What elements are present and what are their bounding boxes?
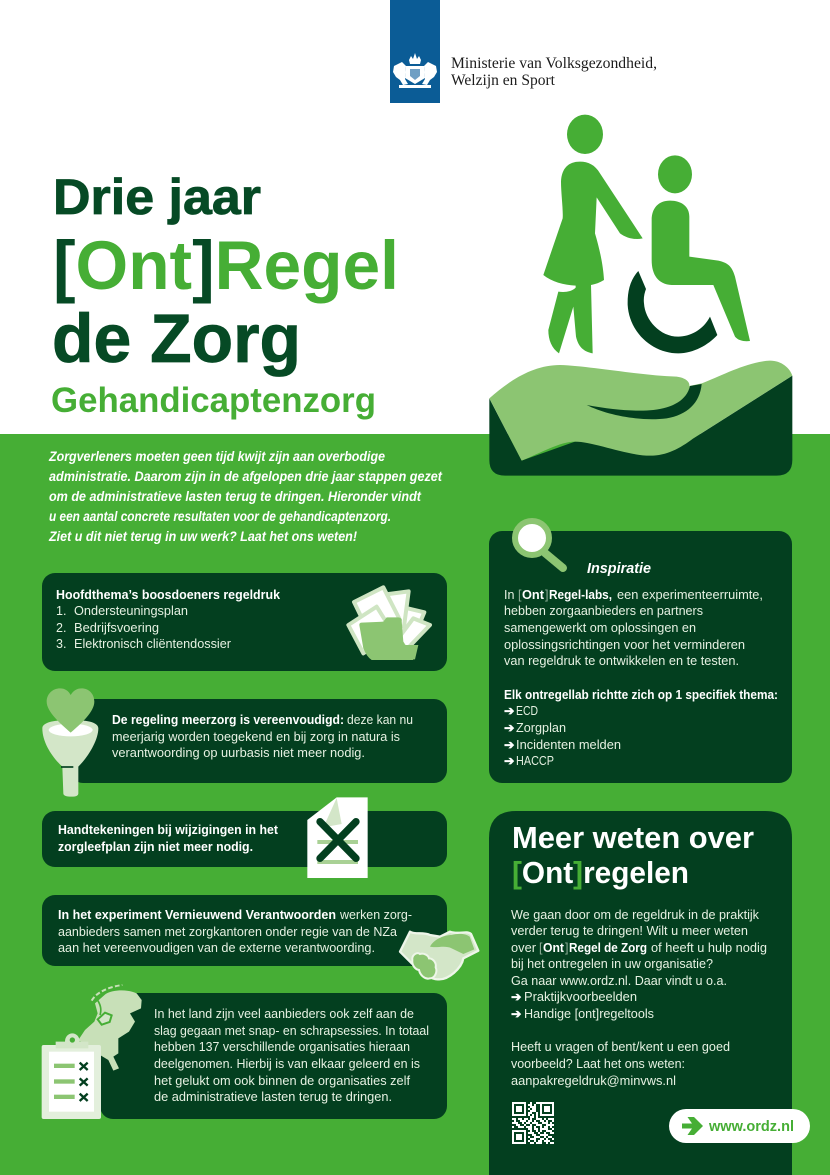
panel: inspiratie: ➔	[504, 738, 515, 752]
panel: hoofdthema's: Ondersteuningsplan	[74, 604, 188, 618]
panel: inspiratie: een experimenteerruimte,	[617, 588, 763, 602]
panel: inspiratie: Elk ontregellab richtte zich op 1 specifiek thema:	[504, 688, 778, 702]
panel: meer weten: [Ont]regelen	[512, 855, 689, 890]
panel: hoofdthema's: 1.	[56, 604, 66, 618]
icon: clipboard checklist	[42, 1033, 101, 1119]
panel: inspiratie: Incidenten melden	[516, 738, 621, 752]
icon: heart in funnel	[42, 688, 98, 797]
button: www.ordz.nl	[669, 1109, 810, 1143]
panel: regeling meerzorg: verantwoording op uurbasis niet meer nodig.	[112, 746, 365, 760]
panel: snap- en schrapsessies: het gelukt om ook binnen de organisaties zelf	[154, 1074, 411, 1088]
panel: inspiratie	[489, 521, 792, 783]
panel: hoofdthema's: Bedrijfsvoering	[74, 621, 159, 635]
panel: meer weten: over	[511, 941, 536, 955]
panel: meer weten: ➔	[511, 1007, 522, 1021]
panel: vernieuwend verantwoorden: In het experiment Vernieuwend Verantwoorden	[58, 908, 336, 922]
icon: handshake	[400, 932, 478, 979]
panel: meer weten: Heeft u vragen of bent/kent u een goed	[511, 1040, 730, 1054]
panel: inspiratie: ➔	[504, 721, 515, 735]
panel: inspiratie: Regel-labs,	[549, 588, 612, 602]
panel: vernieuwend verantwoorden: werken zorg-	[339, 908, 412, 922]
panel: inspiratie: [	[518, 588, 522, 602]
intro text	[48, 449, 442, 544]
title: [Ont]Regel	[53, 227, 399, 304]
panel: meer weten: ➔	[511, 990, 522, 1004]
panel: regeling meerzorg: De regeling meerzorg is vereenvoudigd:	[112, 713, 344, 727]
panel: handtekeningen: zorgleefplan zijn niet meer nodig.	[58, 840, 253, 854]
panel: inspiratie: ECD	[516, 704, 538, 718]
panel: hoofdthema's: Hoofdthema’s boosdoeners regeldruk	[56, 588, 280, 602]
panel: snap- en schrapsessies: slag gegaan met snap- en schrapsessies. In totaal	[154, 1024, 429, 1038]
QR code	[512, 1102, 554, 1144]
ministry name: Welzijn en Sport	[451, 72, 556, 89]
ministry name	[451, 55, 657, 89]
panel: hoofdthema's: Elektronisch cliëntendossier	[74, 637, 231, 651]
ministry name: Ministerie van Volksgezondheid,	[451, 55, 657, 72]
panel: inspiratie: oplossingsrichtingen voor het verminderen	[504, 638, 745, 652]
panel: inspiratie: hebben zorgaanbieders en partners	[504, 604, 703, 618]
panel: meer weten: of heeft u hulp nodig	[651, 941, 767, 955]
icon: arrow	[682, 1117, 703, 1135]
panel: inspiratie: ➔	[504, 754, 515, 768]
panel: snap- en schrapsessies: de administratieve lasten terug te dringen.	[154, 1090, 392, 1104]
panel: meer weten: bij het ontregelen in uw organisatie?	[511, 957, 713, 971]
panel: hoofdthema's	[42, 573, 447, 671]
panel: meer weten: We gaan door om de regeldruk in de praktijk	[511, 908, 760, 922]
panel: inspiratie: HACCP	[516, 754, 554, 768]
panel: inspiratie: Ont	[522, 588, 545, 602]
panel: meer weten: Handige [ont]regeltools	[524, 1007, 654, 1021]
panel: inspiratie: samengewerkt om oplossingen en	[504, 621, 696, 635]
panel: meer weten: verder terug te dringen! Wilt u meer weten	[511, 924, 748, 938]
panel: meer weten: Ont	[543, 941, 565, 955]
logo: Rijksoverheid	[390, 0, 440, 103]
panel: inspiratie: van regeldruk te ontwikkelen en te testen.	[504, 654, 739, 668]
intro text: administratie. Daarom zijn in de afgelopen drie jaar stappen gezet	[49, 469, 442, 484]
panel: snap- en schrapsessies	[42, 985, 447, 1119]
panel: regeling meerzorg: meerjarig worden toegekend en bij zorg in natura is	[112, 730, 400, 744]
panel: handtekeningen	[42, 797, 447, 878]
title: de Zorg	[52, 300, 301, 377]
panel: snap- en schrapsessies: hebben 137 verschillende organisaties hieraan	[154, 1040, 410, 1054]
icon: magnifying glass	[515, 521, 563, 568]
panel: vernieuwend verantwoorden: aanbieders samen met zorgkantoren onder regie van de NZa	[58, 925, 397, 939]
panel: meer weten: Meer weten over	[512, 820, 754, 855]
illustration: care figures on a hand	[489, 115, 792, 476]
panel: inspiratie: ]	[545, 588, 548, 602]
panel: vernieuwend verantwoorden: aan het vereenvoudigen van de externe verantwoording.	[58, 941, 375, 955]
title: Gehandicaptenzorg	[51, 381, 376, 420]
panel: handtekeningen: Handtekeningen bij wijzigingen in het	[58, 823, 279, 837]
icon: crossed-out document	[307, 797, 368, 878]
panel: snap- en schrapsessies: In het land zijn veel aanbieders ook zelf aan de	[154, 1007, 414, 1021]
panel: regeling meerzorg: deze kan nu	[347, 713, 413, 727]
panel: inspiratie: Inspiratie	[587, 560, 651, 577]
button: www.ordz.nl: www.ordz.nl	[708, 1118, 794, 1135]
panel: hoofdthema's: 2.	[56, 621, 66, 635]
panel: meer weten	[489, 811, 792, 1175]
intro text: Zorgverleners moeten geen tijd kwijt zijn aan overbodige	[48, 449, 385, 464]
panel: snap- en schrapsessies: deelgenomen. Hierbij is van elkaar geleerd en is	[154, 1057, 420, 1071]
panel: hoofdthema's: 3.	[56, 637, 66, 651]
panel: inspiratie: ➔	[504, 704, 515, 718]
title: Drie jaar	[53, 169, 261, 225]
panel: meer weten: [	[539, 941, 543, 955]
panel: meer weten: ]	[565, 941, 568, 955]
panel: meer weten: voorbeeld? Laat het ons weten:	[511, 1057, 685, 1071]
icon: folder with papers	[348, 587, 430, 660]
panel: meer weten: aanpakregeldruk@minvws.nl	[511, 1074, 676, 1088]
intro text: Ziet u dit niet terug in uw werk? Laat het ons weten!	[48, 529, 357, 544]
panel: meer weten: Praktijkvoorbeelden	[524, 990, 637, 1004]
icon: map of the Netherlands	[78, 985, 142, 1071]
panel: inspiratie: Zorgplan	[516, 721, 566, 735]
panel: inspiratie: In	[504, 588, 514, 602]
panel: meer weten: Regel de Zorg	[569, 941, 647, 955]
panel: meer weten: Ga naar www.ordz.nl. Daar vindt u o.a.	[511, 974, 727, 988]
intro text: u een aantal concrete resultaten voor de gehandicaptenzorg.	[49, 509, 391, 524]
panel: vernieuwend verantwoorden	[42, 895, 478, 979]
intro text: om de administratieve lasten terug te dringen. Hieronder vindt	[49, 489, 421, 504]
panel: regeling meerzorg	[42, 688, 447, 797]
title	[51, 169, 399, 420]
